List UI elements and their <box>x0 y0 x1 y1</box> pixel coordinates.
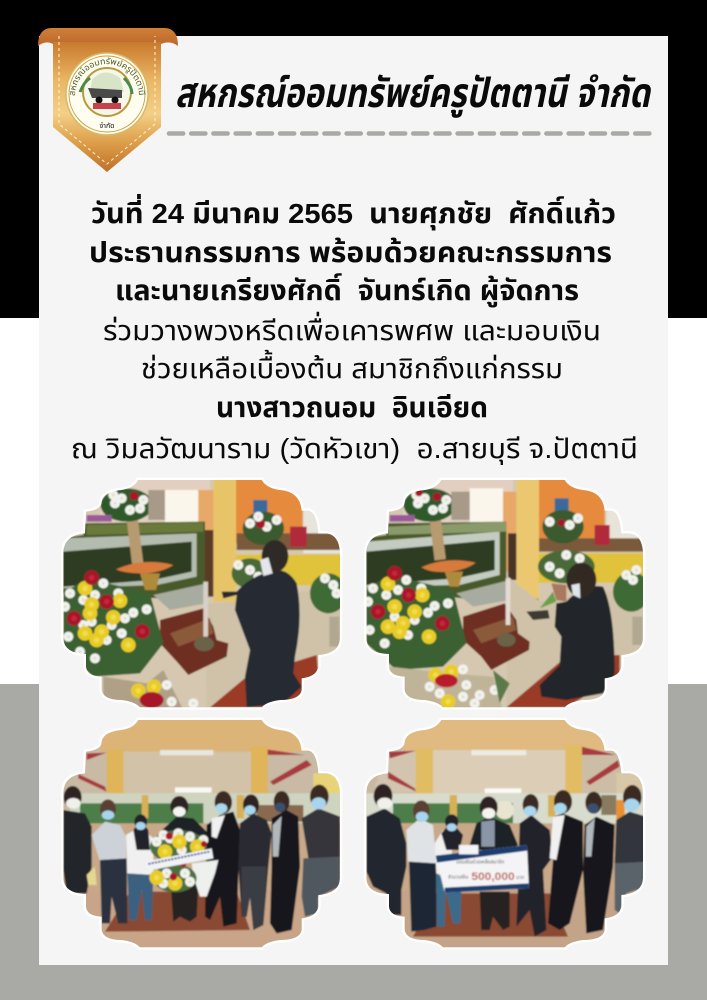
line 7: ณ วิมลวัฒนาราม (วัดหัวเขา) อ.สายบุรี จ.ปัตตานี <box>71 433 638 465</box>
dashed divider <box>169 131 652 136</box>
background: grey band <box>0 684 707 1000</box>
line 1: วันที่ 24 มีนาคม 2565 นายศุภชัย ศักดิ์แก้ว <box>91 193 616 230</box>
ribbon stitching <box>59 36 155 164</box>
line 6: นางสาวถนอม อินเอียด <box>216 392 488 423</box>
line 4: ร่วมวางพวงหรีดเพื่อเคารพศพ และมอบเงิน <box>103 311 601 346</box>
cheque board: จำนวนเงิน <box>448 874 468 881</box>
cheque board <box>436 845 529 893</box>
logo seal <box>65 52 149 136</box>
ribbon body <box>53 42 161 172</box>
announcement text <box>71 193 638 465</box>
background: black band <box>0 0 707 318</box>
photo 2: man praying at coffin <box>364 478 645 710</box>
line 5: ช่วยเหลือเบื้องต้น สมาชิกถึงแก่กรรม <box>141 349 563 384</box>
line 3: และนายเกรียงศักดิ์ จันทร์เกิด ผู้จัดการ <box>115 273 579 308</box>
logo caption: จำกัด <box>99 122 115 130</box>
photo 3: group with funeral wreath <box>61 718 342 950</box>
background: white band <box>0 318 707 684</box>
cheque board: 500,000 <box>471 871 515 883</box>
cheque board: บาท <box>516 875 524 881</box>
ribbon badge with logo <box>38 28 178 172</box>
photo 1: man paying respects at coffin <box>61 478 342 710</box>
ribbon fold <box>38 28 178 48</box>
line 2: ประธานกรรมการ พร้อมด้วยคณะกรรมการ <box>89 237 612 268</box>
cheque board: มอบเงินช่วยเหลือสมาชิก <box>456 858 504 865</box>
photo 4: group with donation cheque <box>364 718 645 950</box>
logo ring text: สหกรณ์ออมทรัพย์ครูปัตตานี <box>70 57 146 96</box>
